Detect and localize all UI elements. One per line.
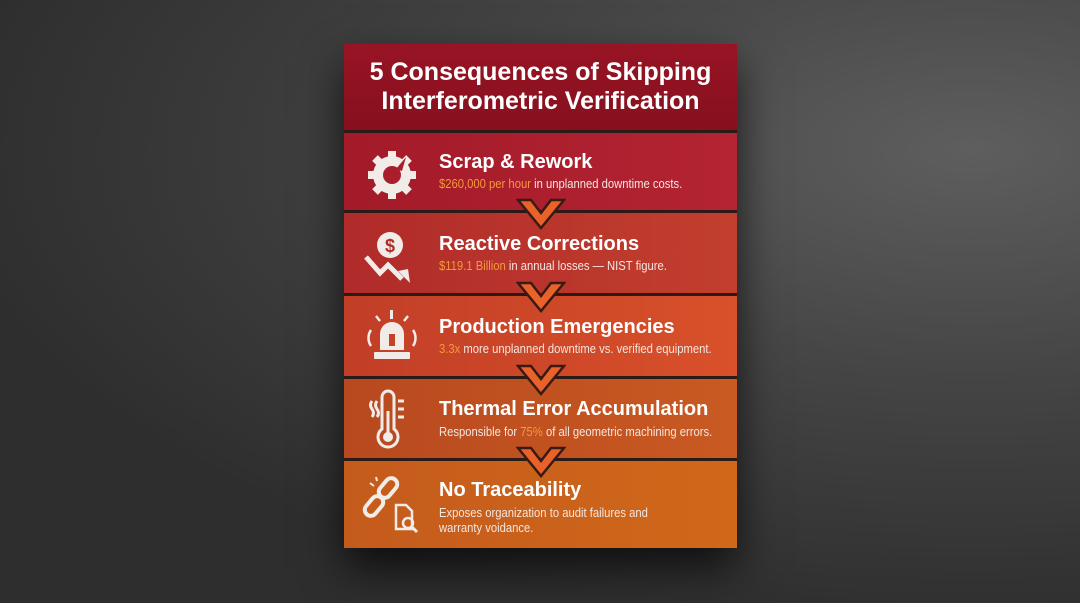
- panel: production emergencies: 3.3x more unplanned downtime vs. verified equipment.: [439, 342, 712, 356]
- panel: no traceability: Exposes organization to audit failures and: [439, 506, 648, 520]
- panel: no traceability: [344, 458, 737, 548]
- icon: dollar with falling arrow: [364, 232, 410, 283]
- icon: gear: [368, 151, 416, 199]
- infographic card: [344, 44, 737, 548]
- panel: thermal error accumulation: Thermal Error Accumulation: [439, 398, 708, 420]
- panel: production emergencies: Production Emergencies: [439, 316, 675, 338]
- panel: production emergencies: [344, 293, 737, 379]
- arrow: chevron 4: [516, 446, 566, 478]
- panel: no traceability: warranty voidance.: [439, 521, 533, 535]
- panel: reactive corrections: $119.1 Billion in annual losses — NIST figure.: [439, 259, 667, 273]
- icon: dollar with falling arrow: $: [385, 236, 395, 256]
- title: [344, 44, 737, 130]
- panel: thermal error accumulation: [344, 376, 737, 461]
- panel: scrap & rework: $260,000 per hour in unplanned downtime costs.: [439, 177, 682, 191]
- icon: siren: [367, 310, 417, 359]
- panel: scrap & rework: [344, 130, 737, 213]
- arrow: chevron 2: [516, 282, 566, 313]
- arrow: chevron 3: [516, 364, 566, 396]
- title: 5 Consequences of Skipping: [370, 58, 711, 86]
- arrow: chevron 1: [516, 198, 566, 230]
- panel: reactive corrections: Reactive Corrections: [439, 233, 639, 255]
- panel: scrap & rework: Scrap & Rework: [439, 151, 592, 173]
- icon: thermometer: [369, 390, 404, 448]
- panel: no traceability: No Traceability: [439, 479, 581, 501]
- icon: broken link and document: [362, 476, 418, 533]
- title: Interferometric Verification: [381, 87, 700, 115]
- panel: thermal error accumulation: Responsible for 75% of all geometric machining errors.: [439, 425, 712, 439]
- panel: reactive corrections: [344, 210, 737, 296]
